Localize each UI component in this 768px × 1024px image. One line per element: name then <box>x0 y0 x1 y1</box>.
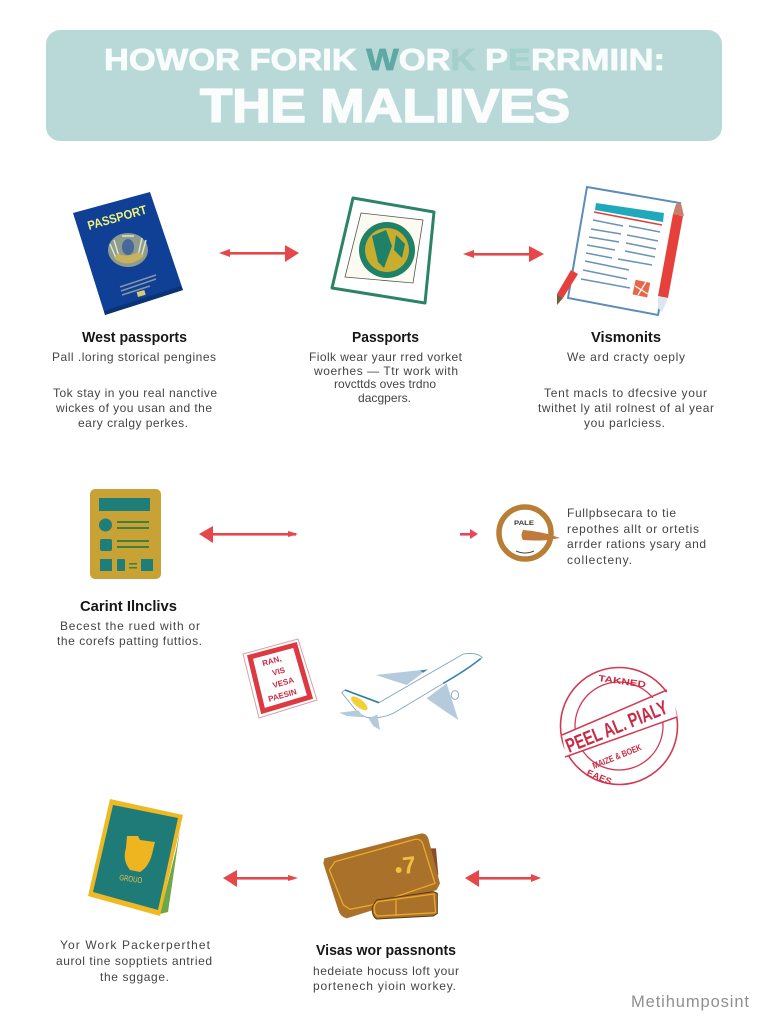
text: dial description: arrder rations ysary and <box>567 537 706 551</box>
step: carint ilnclivs: Carint Ilnclivs <box>80 599 177 615</box>
text: permit book description <box>56 938 212 984</box>
step: west passports: eary cralgy perkes. <box>78 416 188 430</box>
title line one: HOWOR FORIK WORK PERRMIIN: <box>104 42 665 77</box>
icon: gold document card <box>90 489 161 579</box>
icon: square red stamp <box>243 639 317 718</box>
arrow: row two left <box>199 526 298 543</box>
text: permit book description: aurol tine sopptiets antried <box>56 954 212 968</box>
step: west passports <box>52 330 217 430</box>
step: passports: rovcttds oves trdno <box>334 377 436 391</box>
icon: square red stamp: PAESIN <box>267 687 298 704</box>
text: dial description: Fullpbsecara to tie <box>567 506 676 520</box>
step: vismonits: you parlciess. <box>584 416 665 430</box>
step: west passports: Tok stay in you real nanctive <box>53 386 217 400</box>
icon: blue passport <box>73 192 183 315</box>
title line two: THE MALIIVES <box>200 79 570 132</box>
icon: round dial badge: PALE <box>514 520 535 527</box>
icon: large red pen <box>658 214 683 298</box>
step: visas wor passnonts <box>313 943 459 993</box>
step: vismonits <box>538 330 714 430</box>
step: visas wor passnonts: portenech yioin workey. <box>313 979 456 993</box>
footer brand text: Metihumposint <box>631 993 749 1011</box>
step: vismonits: Tent macls to dfecsive your <box>544 386 707 400</box>
icon: application document with pens <box>557 187 684 315</box>
step: carint ilnclivs <box>57 599 202 648</box>
step: passports: Fiolk wear yaur rred vorket <box>309 350 463 364</box>
step: vismonits: Vismonits <box>591 330 661 346</box>
step: passports: dacgpers. <box>358 391 411 405</box>
icon: small red pen <box>557 270 578 298</box>
step: passports: woerhes — Ttr work with <box>313 364 458 378</box>
icon: round red stamp: PEEL AL. PIALY <box>563 697 671 758</box>
step: passports: Passports <box>352 330 419 346</box>
text: dial description: collecteny. <box>567 553 632 567</box>
title banner <box>46 30 722 141</box>
step: west passports: wickes of you usan and the <box>55 401 212 415</box>
text: dial description: repothes allt or ortetis <box>567 522 699 536</box>
icon: green and gold permit book: GROUO <box>119 873 143 885</box>
icon: round dial badge <box>499 507 560 559</box>
arrow: book to wallet <box>223 870 298 887</box>
icon: square red stamp: RAN, <box>261 654 282 668</box>
text: dial description <box>567 506 706 567</box>
icon: round red stamp <box>560 668 678 787</box>
arrow: small row two <box>460 529 478 539</box>
step: vismonits: We ard cracty oeply <box>567 350 685 364</box>
icon: round red stamp: EAES <box>585 768 613 787</box>
icon: square red stamp: VIS <box>271 665 287 678</box>
icon: round red stamp: MAIZE & BOEK <box>591 742 643 771</box>
icon: brown wallet <box>323 833 440 919</box>
step: visas wor passnonts: Visas wor passnonts <box>316 943 456 959</box>
icon: square red stamp: VESA <box>272 675 295 690</box>
text: permit book description: the sggage. <box>100 970 169 984</box>
arrow: passport to stamp <box>219 245 299 262</box>
step: passports <box>309 330 463 405</box>
step: west passports: Pall .loring storical pengines <box>52 350 216 364</box>
step: west passports: West passports <box>82 330 187 346</box>
icon: airplane <box>339 653 482 730</box>
icon: green framed stamp <box>332 198 434 303</box>
step: carint ilnclivs: Becest the rued with or <box>60 619 200 633</box>
arrow: wallet to right <box>465 870 541 887</box>
step: carint ilnclivs: the corefs patting futtios. <box>57 634 202 648</box>
icon: brown wallet: 7 <box>401 852 417 880</box>
step: vismonits: twithet ly atil rolnest of al year <box>538 401 714 415</box>
icon: green and gold permit book <box>88 799 183 916</box>
icon: round red stamp: TAKNED <box>598 673 647 690</box>
icon: blue passport: PASSPORT <box>86 203 149 233</box>
step: visas wor passnonts: hedeiate hocuss loft your <box>313 964 459 978</box>
arrow: stamp to document <box>463 246 544 262</box>
text: permit book description: Yor Work Packerperthet <box>60 938 211 952</box>
